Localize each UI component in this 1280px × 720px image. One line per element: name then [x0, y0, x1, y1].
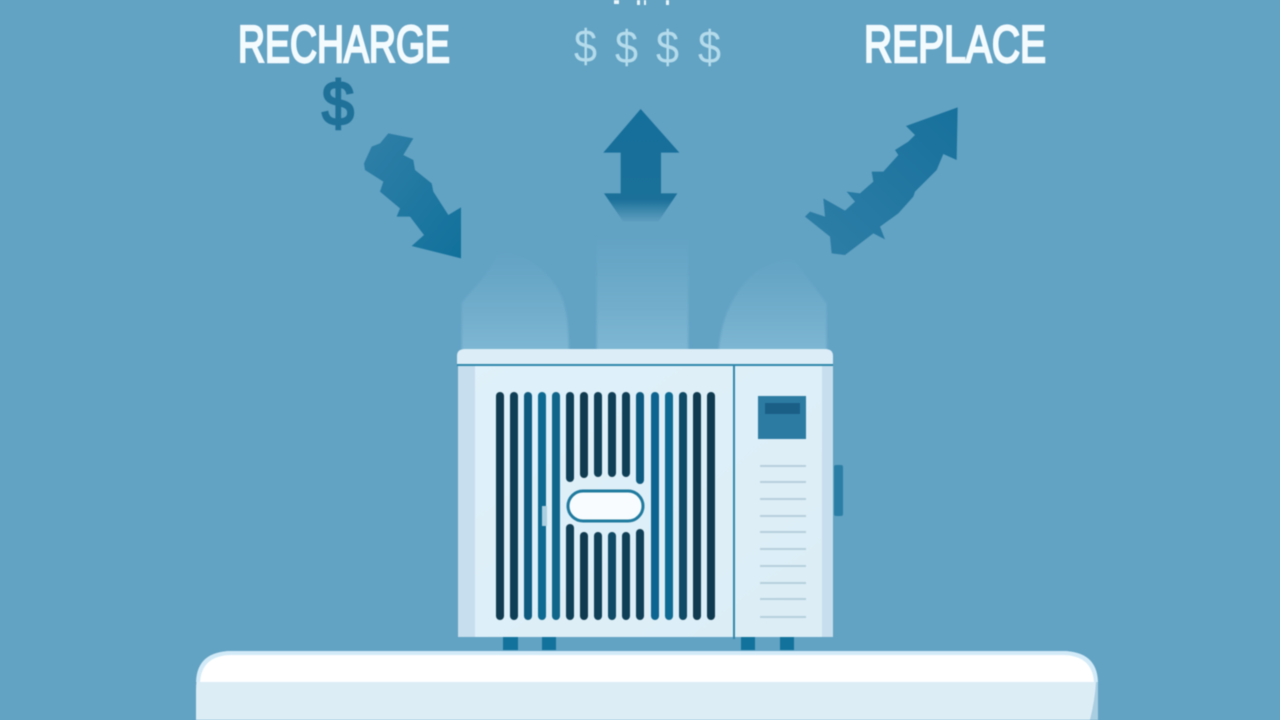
- top cap: [457, 349, 833, 365]
- display screen: [758, 396, 806, 439]
- outdoor AC unit: [457, 349, 843, 650]
- platform side shadow: [1090, 682, 1098, 720]
- steam plumes: [462, 235, 827, 355]
- unit body: [458, 362, 833, 637]
- side handle: [834, 465, 843, 516]
- icon: four dollar signs: $: [656, 21, 679, 73]
- platform top surface: [196, 651, 1098, 682]
- arrow: double-headed centre: [603, 109, 679, 222]
- unit feet: [503, 637, 794, 650]
- icon: four dollar signs: $: [574, 20, 597, 72]
- latch on grille: [542, 506, 547, 526]
- side vent lines: [760, 466, 806, 617]
- arrow: up to replace: [805, 107, 958, 255]
- left shaded edge: [458, 365, 475, 637]
- icon: four dollar signs: [574, 20, 721, 73]
- heading: replace: REPLACE: [864, 16, 1046, 74]
- platform: [196, 651, 1098, 720]
- arrow: down to recharge: [364, 133, 461, 258]
- icon: four dollar signs: $: [698, 21, 721, 73]
- fan grille slats: [500, 396, 711, 616]
- icon: single dollar sign: $: [322, 70, 354, 139]
- platform front: [196, 651, 1098, 720]
- clipped heading fragments: repair: [614, 0, 669, 5]
- centre badge: [568, 491, 643, 521]
- icon: four dollar signs: $: [615, 21, 638, 73]
- panel divider: [733, 366, 735, 639]
- display readout: [765, 403, 800, 414]
- right shaded edge: [822, 365, 833, 637]
- heading: recharge: RECHARGE: [238, 16, 450, 74]
